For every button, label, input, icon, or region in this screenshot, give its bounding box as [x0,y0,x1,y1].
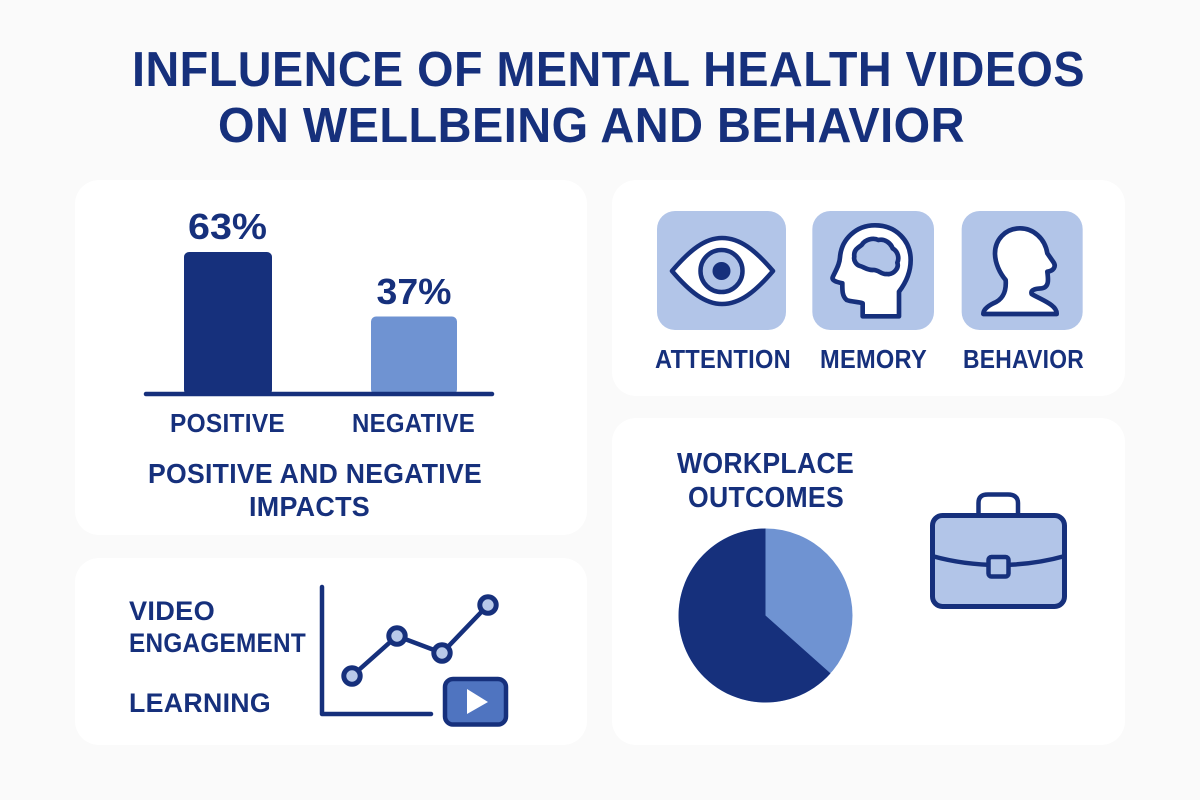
icon: head silhouette [962,211,1083,330]
label: positive: POSITIVE [170,408,285,438]
panel: video engagement and learning [75,558,587,745]
panel: positive and negative impacts [75,180,587,535]
line chart [322,587,496,714]
label: attention: ATTENTION [655,344,791,374]
title [132,43,1085,153]
label: behavior: BEHAVIOR [963,344,1084,374]
panel caption: IMPACTS [249,491,370,522]
panel caption [148,458,482,522]
heading: workplace outcomes [677,448,854,514]
heading: workplace outcomes: WORKPLACE [677,448,854,480]
label: video engagement: ENGAGEMENT [129,628,306,658]
panel: attention, memory, behavior [612,180,1125,396]
panel caption: POSITIVE AND NEGATIVE [148,458,482,489]
value: 37%: 37% [376,271,452,312]
label: video engagement [129,596,306,658]
label: video engagement: VIDEO [129,596,215,626]
panel: workplace outcomes [612,418,1125,745]
title: ON WELLBEING AND BEHAVIOR [218,99,965,153]
label: negative: NEGATIVE [352,408,475,438]
icon: video play button [445,679,506,724]
value: 63%: 63% [188,206,267,247]
chart baseline [146,392,492,396]
label: memory: MEMORY [820,344,927,374]
icon: head with brain [812,211,934,330]
title: INFLUENCE OF MENTAL HEALTH VIDEOS [132,43,1085,97]
pie chart [678,528,852,702]
label: learning: LEARNING [129,688,271,718]
icon: briefcase [932,494,1065,606]
bar: positive [184,252,272,395]
bar: negative [371,316,457,394]
icon: eye [657,211,786,330]
bar chart [146,206,492,438]
heading: workplace outcomes: OUTCOMES [688,482,844,514]
